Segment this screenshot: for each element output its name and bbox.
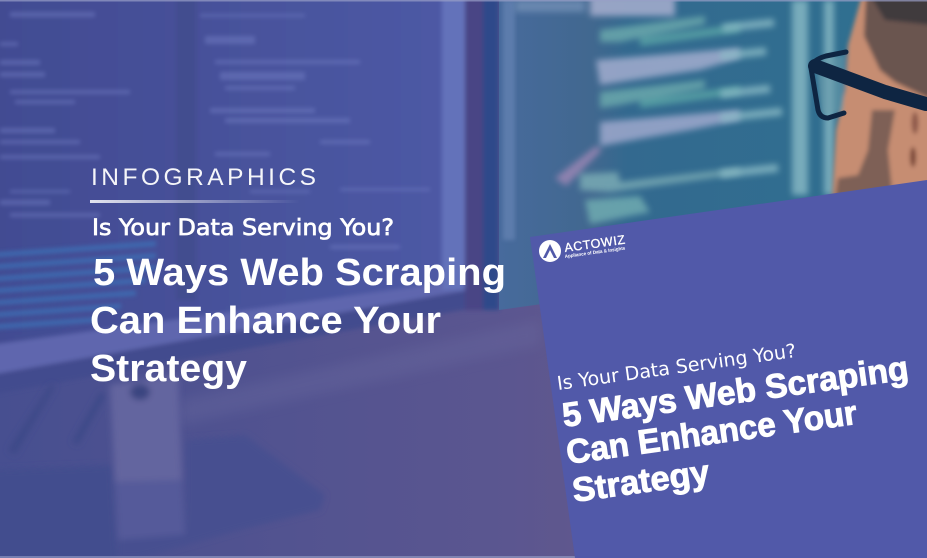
code blocks on right monitor [515,0,740,224]
side column on right monitor [503,0,515,240]
logo: Actowiz: Appliance of Data & Insights [564,246,626,260]
card title [560,349,911,510]
logo: Actowiz: ACTOWIZ [563,233,626,255]
main title: Strategy [90,348,247,390]
left monitor screen [0,0,499,395]
man with glasses [811,0,927,200]
divider rule [90,200,300,203]
monitor stand [0,375,325,558]
card title: 5 Ways Web Scraping [560,349,911,435]
card subtitle: Is Your Data Serving You? [556,340,797,395]
logo: Actowiz [539,233,626,262]
photo edge highlights [0,0,927,2]
main title: 5 Ways Web Scraping [93,252,506,294]
subtitle: Is Your Data Serving You? [92,216,394,241]
glasses [811,52,926,118]
heading block: left [90,164,506,390]
blue code block on left monitor [0,241,156,329]
right monitor screen [499,0,927,310]
code lines on left monitor [0,12,430,249]
main title: Can Enhance Your [90,300,441,342]
eyebrow label: INFOGRAPHICS [91,164,316,191]
card title: Strategy [570,453,712,510]
card title: Can Enhance Your [564,394,859,472]
desk highlight [180,320,540,425]
code lines near the man [720,0,834,195]
tilted report cover card [530,180,927,558]
